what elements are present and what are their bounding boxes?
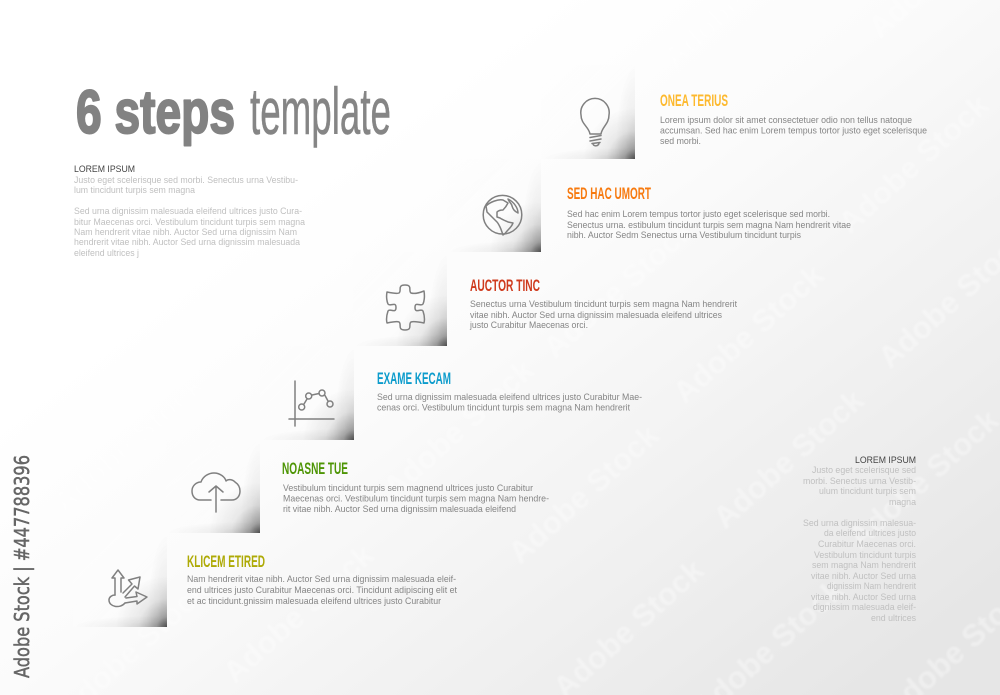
- intro text block, top left: Nam hendrerit vitae nibh. Auctor Sed urna dignissim Nam: [74, 226, 297, 237]
- intro text block, top left: LOREM IPSUM: [74, 163, 135, 174]
- step 6 panel: [73, 533, 457, 627]
- step 4 heading: EXAME KECAM: [377, 370, 451, 388]
- step 2 text: Sed hac enim Lorem tempus tortor justo eget scelerisque sed morbi.: [567, 208, 830, 219]
- step 5 shadow square: [166, 440, 260, 533]
- watermarks: Adobe Stock: [666, 257, 831, 410]
- stock credit, vertical: Adobe Stock | #447788396: [10, 455, 34, 678]
- step 2 text: Senectus urna. estibulum tincidunt turpis sem magna Nam hendrerit vitae: [567, 219, 851, 230]
- step 5 text: Vestibulum tincidunt turpis sem magnend ultrices justo Curabitur: [283, 482, 533, 493]
- title: [76, 74, 391, 148]
- text block, bottom right: Curabitur Maecenas orci.: [818, 538, 916, 549]
- intro text block, top left: lum tincidunt turpis sem magna: [74, 184, 196, 195]
- watermarks: Adobe Stock: [706, 382, 871, 535]
- intro text block, top left: Sed urna dignissim malesuada eleifend ultrices justo Cura-: [74, 205, 302, 216]
- text block, bottom right: Sed urna dignissim malesua-: [803, 517, 916, 528]
- step 1 panel: [541, 65, 927, 159]
- watermarks: Adobe Stock: [1, 237, 166, 390]
- step 3 heading: AUCTOR TINC: [470, 277, 540, 295]
- step 2 shadow square: [447, 159, 541, 252]
- step 4 shadow square: [260, 346, 354, 440]
- step 1 shadow square: [541, 65, 635, 159]
- step 2 panel: [447, 159, 851, 252]
- text block, bottom right: end ultrices: [871, 612, 916, 623]
- step 6 text: Nam hendrerit vitae nibh. Auctor Sed urna dignissim malesuada eleif-: [187, 573, 456, 584]
- intro text block, top left: bitur Maecenas orci. Vestibulum tincidunt turpis sem magna: [74, 216, 306, 227]
- watermarks: Adobe Stock: [501, 417, 666, 570]
- text block, bottom right: morbi. Senectus urna Vestib-: [803, 475, 916, 486]
- step 2 text: [567, 208, 851, 240]
- icon: globe: [483, 195, 522, 235]
- icon: puzzle piece: [387, 285, 424, 330]
- step 1 heading: ONEA TERIUS: [660, 92, 728, 110]
- step 4 text: [377, 391, 642, 412]
- step 5 panel: [166, 440, 549, 533]
- step 3 text: Senectus urna Vestibulum tincidunt turpis sem magna Nam hendrerit: [470, 298, 737, 309]
- text block, bottom right: Justo eget scelerisque sed: [812, 464, 916, 475]
- step 3 text: vitae nibh. Auctor Sed urna dignissim malesuada eleifend ultrices: [470, 309, 722, 320]
- step 2 text: nibh. Auctor Sedm Senectus urna Vestibulum tincidunt turpis: [567, 229, 801, 240]
- watermarks: Adobe Stock: [376, 352, 541, 505]
- text block, bottom right: vitae nibh. Auctor Sed urna: [811, 570, 917, 581]
- text block, bottom right: dignissim Nam hendrerit: [827, 580, 916, 591]
- watermarks: Adobe Stock: [36, 32, 201, 185]
- watermarks: Adobe Stock: [216, 537, 381, 690]
- text block, bottom right: sem magna Nam hendrerit: [812, 559, 916, 570]
- intro text block, top left: [74, 163, 306, 258]
- step 1 text: sed morbi.: [660, 135, 701, 146]
- text block, bottom right: magna: [889, 496, 917, 507]
- watermarks: Adobe Stock: [46, 367, 211, 520]
- step 3 text: justo Curabitur Maecenas orci.: [469, 319, 588, 330]
- icon: line chart: [289, 381, 334, 426]
- step 1 text: Lorem ipsum dolor sit amet consectetuer odio non tellus natoque: [660, 114, 912, 125]
- watermarks: Adobe Stock: [536, 212, 701, 365]
- text block, bottom right: da eleifend ultrices justo: [824, 527, 916, 538]
- watermarks: Adobe Stock: [366, 42, 531, 195]
- text block, bottom right: dignissim malesuada eleif-: [813, 601, 916, 612]
- icon: cloud upload: [192, 473, 240, 512]
- text block, bottom right: [803, 454, 917, 623]
- icon: light bulb: [581, 98, 609, 146]
- step 3 panel: [353, 252, 737, 346]
- watermarks: Adobe Stock: [206, 202, 371, 355]
- text block, bottom right: vitae nibh. Auctor Sed urna: [811, 591, 917, 602]
- step 2 heading: SED HAC UMORT: [567, 185, 651, 203]
- icon: diverging arrows: [109, 570, 147, 607]
- step 5 text: Maecenas orci. Vestibulum tincidunt turpis sem magna Nam hendre-: [283, 492, 549, 504]
- step 4 panel: [260, 346, 642, 440]
- step 6 text: et ac tincidunt.gnissim malesuada eleifend ultrices justo Curabitur: [187, 595, 441, 606]
- step 4 text: cenas orci. Vestibulum tincidunt turpis sem magna Nam hendrerit: [377, 402, 630, 412]
- title: 6 steps: [76, 78, 235, 146]
- text block, bottom right: ulum tincidunt turpis sem: [819, 485, 916, 496]
- step 6 text: [187, 573, 457, 606]
- step 6 heading: KLICEM ETIRED: [187, 553, 265, 571]
- intro text block, top left: eleifend ultrices j: [74, 247, 139, 258]
- intro text block, top left: Justo eget scelerisque sed morbi. Senectus urna Vestibu-: [74, 174, 298, 185]
- step 1 text: [660, 114, 927, 146]
- text block, bottom right: LOREM IPSUM: [855, 454, 916, 465]
- intro text block, top left: hendrerit vitae nibh. Auctor Sed urna dignissim malesuada: [74, 236, 301, 247]
- title: template: [250, 74, 391, 148]
- step 5 heading: NOASNE TUE: [282, 460, 348, 478]
- step 6 shadow square: [73, 533, 167, 627]
- step 4 text: Sed urna dignissim malesuada eleifend ultrices justo Curabitur Mae-: [377, 391, 642, 402]
- step 5 text: [283, 482, 549, 514]
- step 1 text: accumsan. Sed hac enim Lorem tempus tortor justo eget scelerisque: [660, 124, 927, 136]
- watermarks: Adobe Stock: [831, 87, 996, 240]
- step 3 text: [469, 298, 737, 330]
- step 6 text: end ultrices justo Curabitur Maecenas orci. Tincidunt adipiscing elit et: [187, 584, 457, 595]
- step 3 shadow square: [353, 252, 447, 346]
- step 5 text: rit vitae nibh. Auctor Sed urna dignissim malesuada eleifend: [283, 503, 516, 514]
- text block, bottom right: Vestibulum tincidunt turpis: [814, 549, 916, 560]
